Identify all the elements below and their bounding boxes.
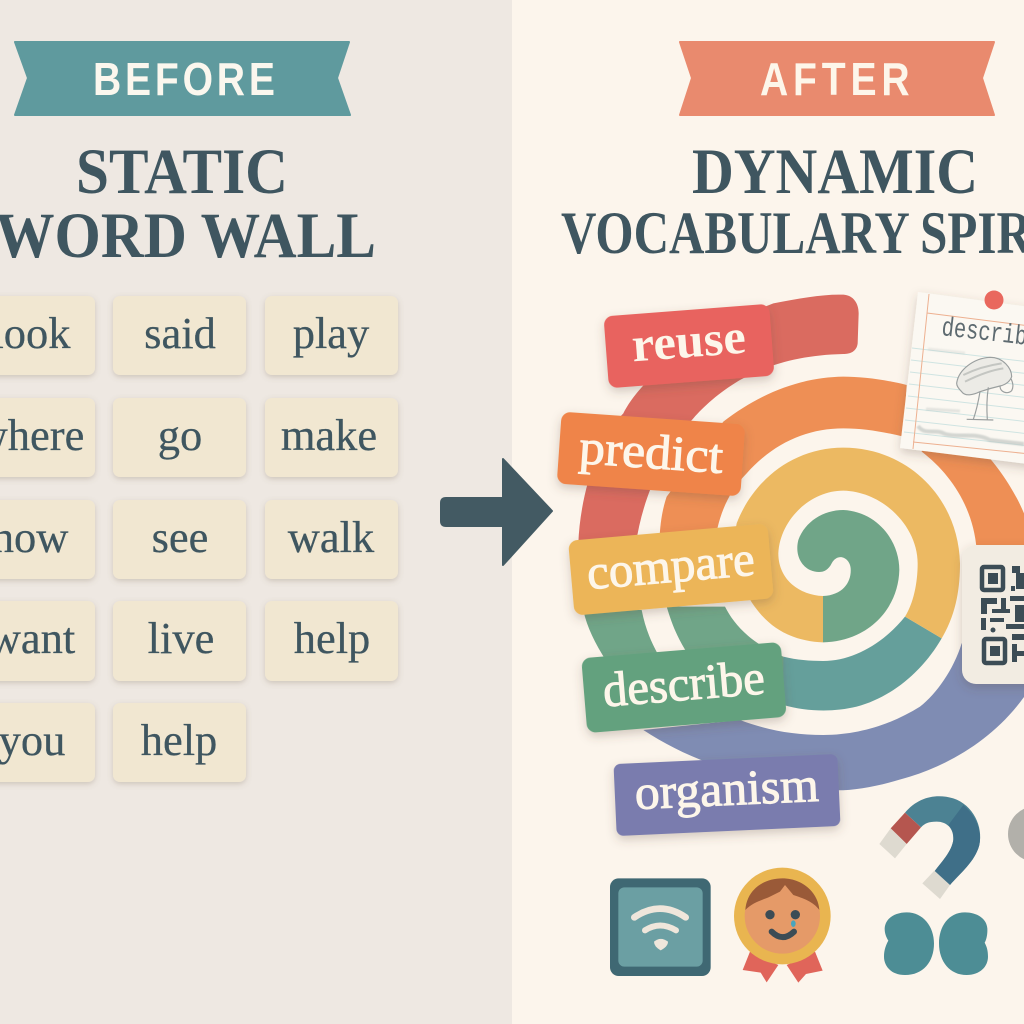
icon: gray circle partial	[1008, 806, 1024, 862]
icon: medal with face	[734, 868, 831, 983]
tag: compare	[568, 523, 774, 616]
word cards grid: you	[0, 715, 65, 765]
banner: after: AFTER	[760, 54, 910, 106]
left background	[0, 0, 512, 1024]
heading: static word wall	[0, 136, 376, 272]
tag: predict: predict	[577, 419, 725, 484]
word cards grid: help	[294, 613, 370, 663]
tag: reuse	[603, 304, 775, 388]
tag: organism: organism	[634, 757, 820, 820]
band: outer green	[583, 610, 658, 662]
banner: before	[15, 42, 350, 115]
tag: compare: compare	[585, 531, 757, 600]
band: orange top	[659, 377, 907, 543]
right background	[512, 0, 1024, 1024]
banner: after	[680, 42, 994, 115]
panel: after	[557, 42, 1024, 983]
word cards grid: make	[281, 410, 377, 460]
icon: wifi tablet	[610, 878, 711, 976]
tag: organism	[613, 754, 841, 836]
pin	[984, 290, 1004, 310]
band: center green	[797, 510, 899, 642]
heading: dynamic vocabulary spiral: DYNAMIC	[692, 136, 978, 208]
heading: static word wall: WORD WALL	[0, 200, 376, 272]
word cards grid: live	[148, 613, 214, 663]
qr card	[962, 545, 1024, 684]
band: yellow	[735, 448, 960, 642]
tag: describe	[581, 642, 787, 733]
word cards grid: help	[141, 715, 217, 765]
faint handwriting smudges	[918, 349, 1024, 444]
note: notebook paper with drawing	[900, 290, 1024, 468]
word cards grid: walk	[288, 512, 375, 562]
band: orange right	[922, 413, 1024, 550]
icon: teal butterfly shape	[884, 912, 988, 975]
band: teal	[783, 617, 942, 710]
banner: before: BEFORE	[93, 54, 275, 106]
margin lines	[913, 294, 1024, 454]
spiral	[578, 295, 1024, 790]
panel: before	[0, 0, 512, 1024]
tag: predict	[557, 412, 745, 496]
icon: horseshoe magnet	[879, 796, 980, 899]
arrow	[441, 459, 552, 565]
word cards grid: play	[293, 308, 370, 358]
band: inner green	[667, 607, 790, 707]
icons row	[610, 796, 988, 983]
tag: reuse: reuse	[630, 309, 748, 372]
band: blue	[643, 613, 1024, 790]
heading: static word wall: STATIC	[76, 136, 288, 208]
heading: dynamic vocabulary spiral	[561, 136, 1024, 266]
tree sketch	[957, 357, 1013, 420]
word cards grid: go	[158, 410, 202, 460]
word cards grid: said	[144, 308, 216, 358]
word cards grid: see	[152, 512, 208, 562]
word cards grid	[0, 296, 398, 782]
tag: describe: describe	[601, 649, 767, 718]
band: red	[578, 295, 859, 543]
